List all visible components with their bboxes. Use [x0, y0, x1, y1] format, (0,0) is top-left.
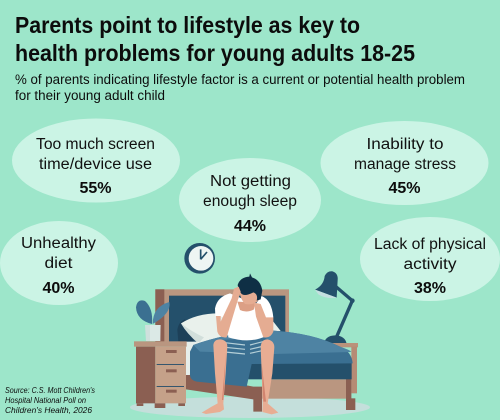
bubble: diet: 40%: [42, 280, 75, 297]
neck and face: [237, 302, 255, 312]
right side table: [327, 343, 358, 393]
shirt: [215, 293, 273, 340]
bubble: physical activity: activity: [404, 256, 457, 273]
bubble: screen time: Too much screen: [36, 136, 155, 153]
nightstand: [134, 341, 187, 408]
bubble: diet: Unhealthy: [21, 235, 96, 252]
bubble: sleep: [179, 158, 321, 242]
bubble: sleep: 44%: [234, 218, 266, 235]
bubble: physical activity: Lack of physical: [374, 236, 486, 253]
title: Parents point to lifestyle as key to: [15, 12, 360, 38]
title: [15, 12, 415, 66]
hair: [238, 273, 262, 301]
title: health problems for young adults 18-25: [15, 40, 415, 66]
bubble: diet: diet: [44, 255, 73, 272]
source note: Children's Health, 2026: [5, 406, 93, 415]
shorts: [213, 337, 273, 356]
legs and feet: [202, 339, 227, 414]
source note: [5, 386, 95, 415]
icon: desk lamp: [315, 271, 355, 344]
bubble: screen time: [12, 118, 180, 202]
subtitle: [15, 72, 465, 103]
floor shadow: [130, 397, 370, 418]
man: [202, 273, 278, 414]
source note: Hospital National Poll on: [5, 396, 87, 405]
bubble: physical activity: [360, 217, 500, 301]
bubble: physical activity: 38%: [414, 280, 446, 297]
bubble: sleep: Not getting: [210, 173, 291, 190]
plant: [136, 300, 170, 341]
arms: [216, 287, 241, 337]
bubble: stress: Inability to: [366, 136, 444, 153]
bubble: sleep: enough sleep: [203, 193, 297, 210]
bed frame: [186, 363, 355, 412]
bubble: stress: [320, 121, 488, 205]
bubble: stress: manage stress: [354, 156, 456, 173]
subtitle: for their young adult child: [15, 88, 165, 103]
mattress and blanket: [186, 331, 353, 387]
icon: wall clock: [184, 243, 215, 274]
bubble: diet: [0, 221, 118, 305]
pillow: [177, 313, 281, 343]
bubble: screen time: time/device use: [39, 156, 152, 173]
subtitle: % of parents indicating lifestyle factor is a current or potential health problem: [15, 72, 465, 87]
bubble: stress: 45%: [388, 180, 421, 197]
illustration: man on bed: [130, 243, 370, 418]
headboard: [155, 289, 289, 346]
source note: Source: C.S. Mott Children's: [5, 386, 95, 395]
bubble: screen time: 55%: [79, 180, 112, 197]
